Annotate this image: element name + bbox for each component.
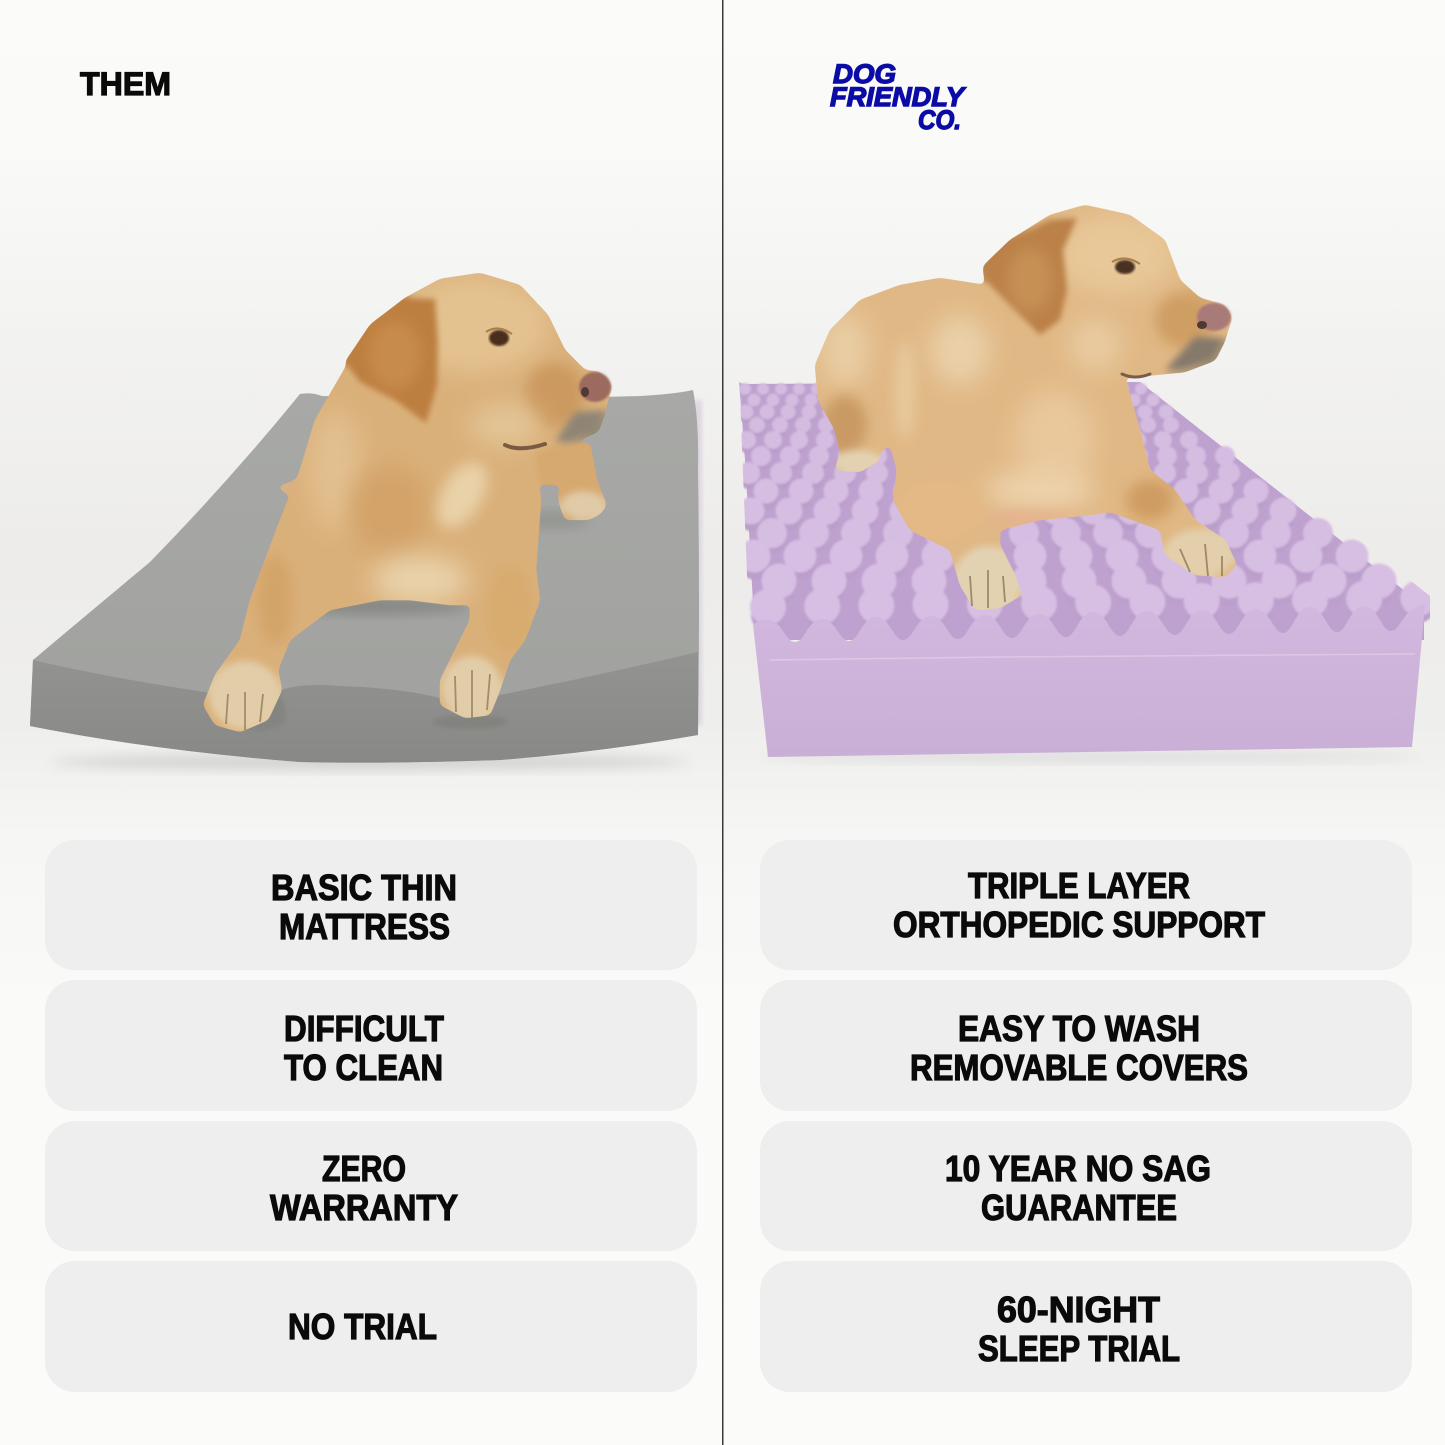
logo: dog friendly co: FRIENDLY xyxy=(830,82,967,112)
rear paw xyxy=(528,443,606,520)
dog features right xyxy=(970,258,1231,608)
tail tip xyxy=(277,479,299,496)
panel: dog friendly row 2: EASY TO WASH xyxy=(958,1008,1200,1049)
heading: them: THEM xyxy=(80,66,171,102)
panel: dog friendly row 4: 60-NIGHT xyxy=(997,1289,1160,1330)
panel: them row 3 xyxy=(45,1121,697,1251)
panel: them row 1: MATTRESS xyxy=(279,906,450,947)
panel: dog friendly row 1: ORTHOPEDIC SUPPORT xyxy=(893,904,1265,945)
ear xyxy=(983,218,1077,335)
muzzle xyxy=(1165,337,1225,370)
panel: dog friendly row 2 xyxy=(760,980,1412,1111)
panel: them row 4: NO TRIAL xyxy=(288,1306,437,1347)
panel: dog friendly row 3 xyxy=(760,1121,1412,1251)
panel: them row 1 xyxy=(45,840,697,970)
ear xyxy=(345,298,438,423)
panel: dog friendly row 1 xyxy=(760,840,1412,970)
side face xyxy=(739,382,772,757)
logo: dog friendly co: CO. xyxy=(918,105,961,135)
seam xyxy=(770,654,1415,660)
muzzle xyxy=(555,410,605,442)
panel: them row 4 xyxy=(45,1261,697,1392)
top face xyxy=(741,382,1424,640)
panel: dog friendly row 3: GUARANTEE xyxy=(981,1187,1177,1228)
illustration: purple egg-crate mattress xyxy=(739,382,1425,762)
foam bumps xyxy=(745,389,1420,615)
dog features left xyxy=(226,328,611,730)
panel: dog friendly row 2: REMOVABLE COVERS xyxy=(910,1047,1248,1088)
panel: dog friendly row 1: TRIPLE LAYER xyxy=(968,865,1190,906)
panel: them row 2: TO CLEAN xyxy=(284,1047,443,1088)
front face with scalloped top xyxy=(753,605,1425,757)
panel: them row 1: BASIC THIN xyxy=(271,867,457,908)
panel: them row 2 xyxy=(45,980,697,1111)
panel: dog friendly row 4: SLEEP TRIAL xyxy=(978,1328,1180,1369)
panel: them row 3: ZERO xyxy=(322,1148,406,1189)
body and head xyxy=(815,205,1236,610)
logo: dog friendly co xyxy=(830,59,967,135)
body and head xyxy=(204,273,612,732)
panel: dog friendly row 3: 10 YEAR NO SAG xyxy=(945,1148,1211,1189)
panel: them row 3: WARRANTY xyxy=(270,1187,458,1228)
illustration: dog on gray mattress xyxy=(204,273,612,732)
illustration: gray thin mattress xyxy=(30,390,702,770)
panel: them row 2: DIFFICULT xyxy=(284,1008,444,1049)
illustration: dog on purple mattress xyxy=(815,205,1236,610)
panel: dog friendly row 4 xyxy=(760,1261,1412,1392)
logo: dog friendly co: DOG xyxy=(833,59,896,89)
center divider xyxy=(722,0,724,1445)
